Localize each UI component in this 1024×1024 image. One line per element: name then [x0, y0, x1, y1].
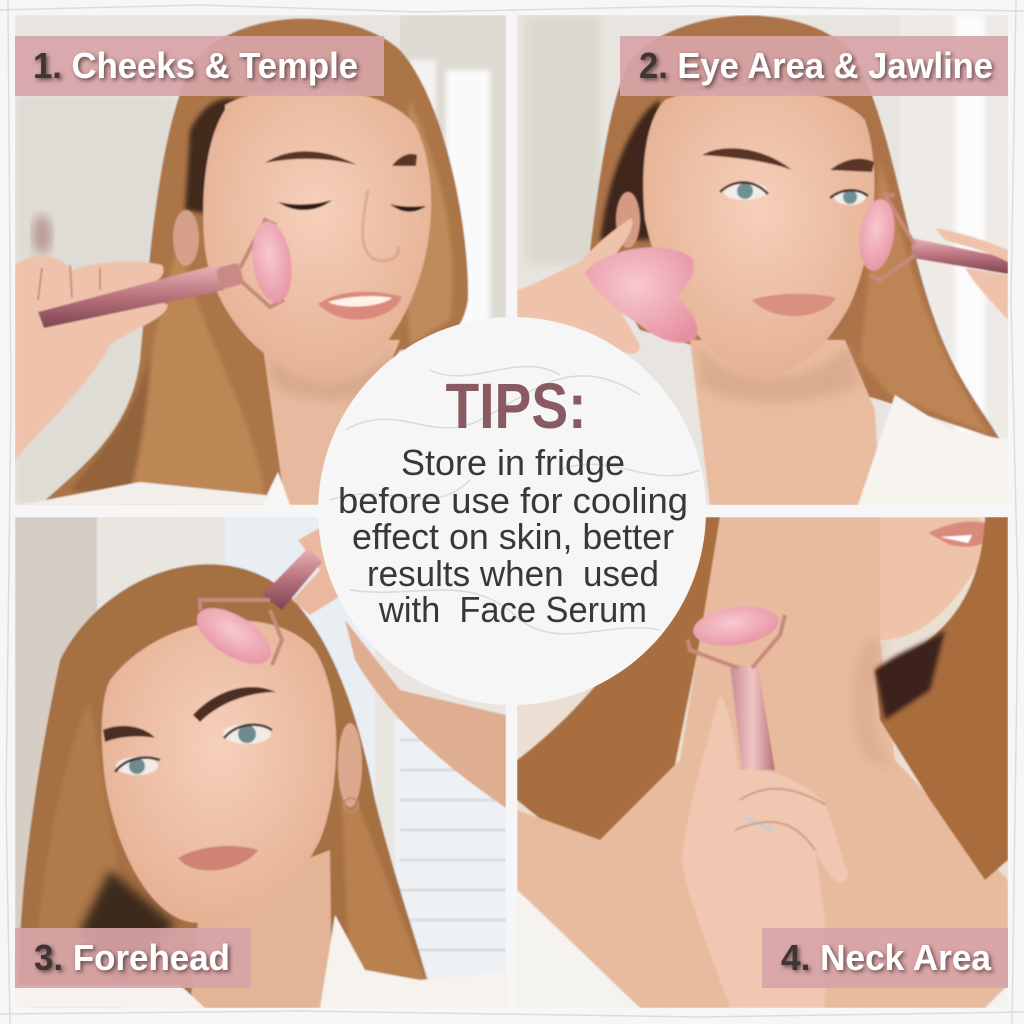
hand behind roller: [292, 528, 338, 616]
hair right: [875, 517, 1008, 880]
label: eye area and jawline: [620, 36, 1008, 96]
tips heading: TIPS:: [446, 370, 586, 442]
tips circle callout: [318, 317, 706, 705]
neck: [262, 340, 400, 505]
label: forehead: [15, 928, 251, 988]
hair left: [517, 517, 725, 860]
roller: [855, 195, 1008, 280]
label: eye area and jawline: 2. Eye Area & Jawline: [639, 45, 993, 86]
arm: [345, 620, 506, 808]
hair: [40, 18, 468, 505]
face: [202, 96, 432, 354]
tips body text: results when used: [367, 553, 659, 594]
roller: [196, 548, 322, 666]
tips body text: [338, 442, 688, 630]
hand: [15, 256, 168, 460]
roller: [688, 601, 785, 770]
robe: [517, 890, 640, 1008]
label: cheeks and temple: 1. Cheeks & Temple: [33, 45, 358, 86]
panel 4: neck area photo: [517, 517, 1008, 1008]
tips body text: effect on skin, better: [352, 516, 674, 557]
eyes and brows: [103, 687, 276, 742]
tips body text: Store in fridge: [401, 442, 625, 483]
neck and robe: [690, 340, 880, 505]
label: neck area: [762, 928, 1008, 988]
label: cheeks and temple: [15, 36, 384, 96]
face: [643, 87, 874, 375]
eyes and brows: [702, 148, 874, 172]
roller: [38, 219, 297, 328]
hand: [682, 695, 848, 1008]
neck and robe: [190, 850, 332, 1008]
tips body text: with Face Serum: [378, 589, 647, 630]
lips: [318, 292, 402, 320]
label: forehead: 3. Forehead: [34, 937, 230, 978]
hair: [590, 15, 1000, 440]
tips body text: before use for cooling: [338, 480, 688, 521]
chest and neck: [517, 517, 1008, 1008]
panel 2: eye area and jawline photo: [517, 15, 1008, 505]
left hand: [517, 218, 633, 333]
face: [102, 620, 336, 923]
hair: [19, 564, 430, 1008]
panel 3: forehead photo: [15, 517, 506, 1008]
label: neck area: 4. Neck Area: [781, 937, 992, 978]
right hand: [935, 228, 1008, 320]
gua sha: [585, 247, 698, 343]
panel 1: cheeks and temple photo: [15, 15, 506, 505]
eyes and brows: [265, 151, 417, 166]
